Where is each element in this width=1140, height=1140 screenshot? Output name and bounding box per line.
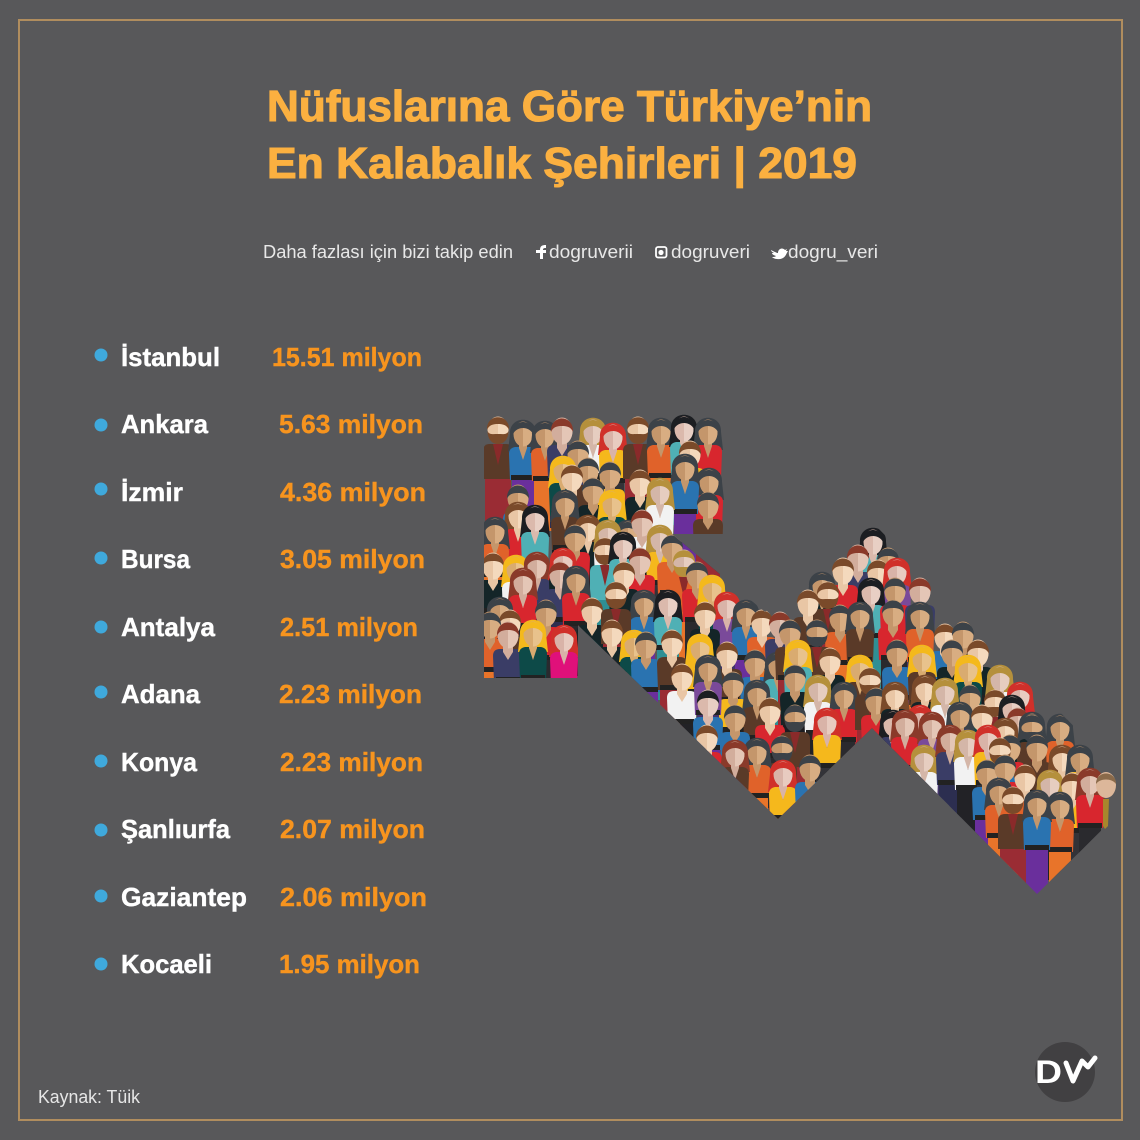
row: Şanlıurfa: 2.07 milyon [280,814,425,844]
row: Şanlıurfa [94,814,425,844]
city list [94,342,427,979]
row: Adana: 2.23 milyon [279,679,422,709]
social media line: Daha fazlası için bizi takip edin [263,242,513,262]
row: Konya [94,747,423,777]
social media line [263,242,878,263]
row: Gaziantep: 2.06 milyon [280,882,427,912]
row: İzmir: 4.36 milyon [280,477,426,507]
row: Kocaeli: Kocaeli [121,949,212,979]
row: İstanbul: 15.51 milyon [272,342,422,372]
row: İzmir: İzmir [121,477,183,507]
row: Ankara: Ankara [121,409,209,439]
row: İzmir [94,477,426,507]
source note: Kaynak: Tüik [38,1087,141,1107]
row: İstanbul [94,342,422,372]
row: Ankara: 5.63 milyon [279,409,423,439]
row: Adana: Adana [121,679,201,709]
row: Adana [94,679,422,709]
row: Ankara [94,409,423,439]
row: Gaziantep [94,882,427,912]
title: En Kalabalık Şehirleri | 2019 [267,139,857,189]
title [267,82,872,189]
logo: DV badge [1035,1042,1095,1102]
row: Kocaeli: 1.95 milyon [279,949,420,979]
social media line: dogru_veri [788,242,878,263]
title: Nüfuslarına Göre Türkiye’nin [267,82,872,131]
row: Bursa: Bursa [121,544,190,574]
row: Gaziantep: Gaziantep [121,882,247,912]
row: Konya: 2.23 milyon [280,747,423,777]
crowd of people forming the map of Turkey [475,415,1105,902]
row: Bursa [94,544,425,574]
row: İstanbul: İstanbul [121,342,220,372]
right edge figure: head and tie [1096,772,1116,829]
row: Bursa: 3.05 milyon [280,544,425,574]
row: Şanlıurfa: Şanlıurfa [121,814,231,844]
social media line: dogruverii [549,242,633,262]
row: Konya: Konya [121,747,198,777]
logo: DV badge: D [1035,1054,1062,1090]
row: Antalya [94,612,418,642]
social media line: dogruveri [671,242,750,262]
row: Antalya: Antalya [121,612,216,642]
row: Kocaeli [94,949,420,979]
row: Antalya: 2.51 milyon [280,612,418,642]
